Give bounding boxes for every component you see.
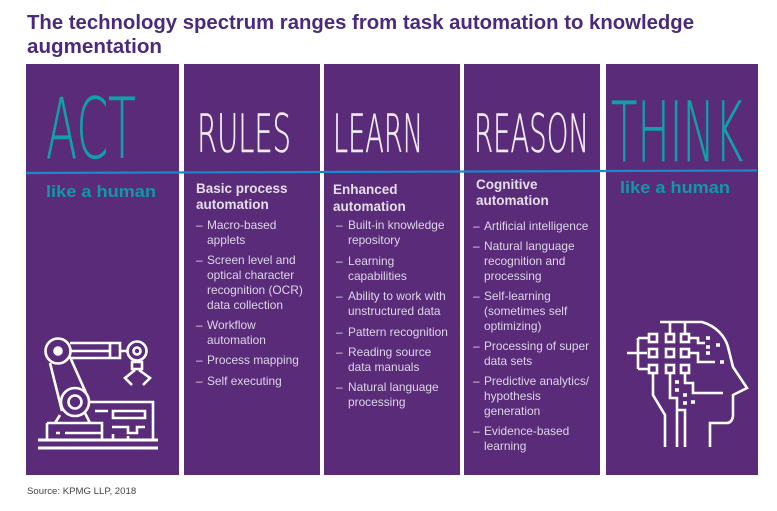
- rules text: –: [196, 218, 203, 232]
- reason text: –: [473, 374, 480, 388]
- rules text: automation: [207, 333, 266, 347]
- learn text: –: [336, 218, 343, 232]
- learn text: Built-in knowledge: [348, 218, 445, 232]
- rules text: [196, 181, 303, 388]
- reason text: [473, 177, 590, 453]
- icon: robot arm: [38, 338, 158, 448]
- reason text: data sets: [484, 354, 532, 368]
- reason text: Evidence-based: [484, 424, 569, 438]
- reason text: Natural language: [484, 239, 575, 253]
- reason text: –: [473, 219, 480, 233]
- reason text: processing: [484, 269, 542, 283]
- rules text: data collection: [207, 298, 283, 312]
- rules text: Workflow: [207, 318, 256, 332]
- reason text: Artificial intelligence: [484, 219, 589, 233]
- title: [27, 11, 694, 58]
- rules text: –: [196, 253, 203, 267]
- learn text: Natural language: [348, 380, 439, 394]
- learn text: Enhanced: [333, 182, 398, 197]
- panel: learn: [324, 64, 460, 475]
- rules text: Screen level and: [207, 253, 296, 267]
- learn text: data manuals: [348, 360, 419, 374]
- rules text: Basic process: [196, 181, 288, 196]
- spectrum line: [26, 170, 757, 173]
- learn text: –: [336, 289, 343, 303]
- reason text: –: [473, 339, 480, 353]
- title: augmentation: [27, 35, 162, 58]
- reason text: –: [473, 424, 480, 438]
- reason text: –: [473, 289, 480, 303]
- rules text: –: [196, 374, 203, 388]
- reason text: generation: [484, 404, 540, 418]
- reason text: optimizing): [484, 319, 542, 333]
- rules text: recognition (OCR): [207, 283, 303, 297]
- reason text: Predictive analytics/: [484, 374, 590, 388]
- learn text: Pattern recognition: [348, 325, 448, 339]
- act tagline: like a human: [46, 183, 156, 201]
- learn text: –: [336, 380, 343, 394]
- rules text: optical character: [207, 268, 294, 282]
- think tagline: like a human: [620, 179, 730, 197]
- rules text: Self executing: [207, 374, 282, 388]
- reason text: Cognitive: [476, 177, 538, 192]
- learn text: processing: [348, 395, 406, 409]
- panel: act: [26, 64, 179, 475]
- learn text: automation: [333, 199, 406, 214]
- rules text: –: [196, 353, 203, 367]
- learn text: –: [336, 345, 343, 359]
- panel: rules: [184, 64, 320, 475]
- title: The technology spectrum ranges from task automation to knowledge: [27, 11, 694, 34]
- heading: LEARN: LEARN: [333, 104, 423, 165]
- icon: digital head: [627, 322, 747, 447]
- source: Source: KPMG LLP, 2018: [27, 486, 136, 497]
- rules text: automation: [196, 197, 269, 212]
- panel: reason: [464, 64, 600, 475]
- learn text: –: [336, 325, 343, 339]
- learn text: Reading source: [348, 345, 432, 359]
- reason text: (sometimes self: [484, 304, 568, 318]
- panel: think: [606, 64, 758, 475]
- learn text: Ability to work with: [348, 289, 446, 303]
- learn text: Learning: [348, 254, 394, 268]
- heading: ACT: ACT: [46, 80, 136, 178]
- reason text: –: [473, 239, 480, 253]
- reason text: Self-learning: [484, 289, 551, 303]
- rules text: –: [196, 318, 203, 332]
- heading: REASON: REASON: [474, 104, 589, 165]
- learn text: [333, 182, 448, 409]
- rules text: Macro-based: [207, 218, 276, 232]
- rules text: Process mapping: [207, 353, 299, 367]
- rules text: applets: [207, 233, 245, 247]
- learn text: –: [336, 254, 343, 268]
- reason text: recognition and: [484, 254, 565, 268]
- heading: RULES: RULES: [197, 104, 291, 165]
- reason text: hypothesis: [484, 389, 541, 403]
- reason text: Processing of super: [484, 339, 589, 353]
- learn text: unstructured data: [348, 304, 441, 318]
- learn text: repository: [348, 233, 400, 247]
- learn text: capabilities: [348, 269, 407, 283]
- reason text: learning: [484, 439, 526, 453]
- reason text: automation: [476, 193, 549, 208]
